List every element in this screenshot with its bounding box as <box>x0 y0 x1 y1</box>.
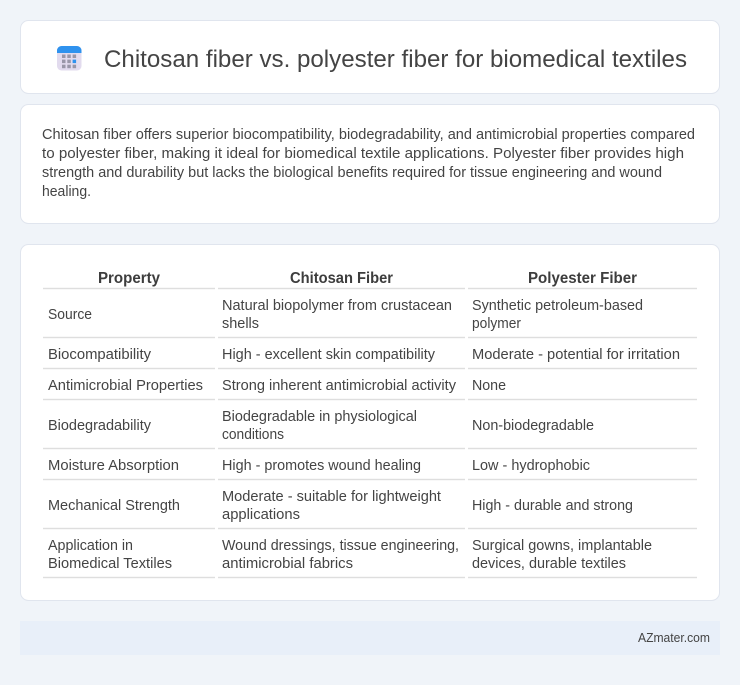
row: mechanical strength: applications <box>222 507 300 523</box>
row: source: Natural biopolymer from crustacean <box>222 298 452 314</box>
table header: Chitosan Fiber <box>290 270 393 287</box>
row: source: polymer <box>472 316 521 332</box>
summary text <box>42 127 695 200</box>
panel: comparison table <box>20 244 720 600</box>
row: mechanical strength <box>48 489 633 523</box>
row: biodegradability: Non-biodegradable <box>472 418 594 434</box>
title: Chitosan fiber vs. polyester fiber for biomedical textiles <box>104 46 687 73</box>
row: moisture absorption: Low - hydrophobic <box>472 458 590 474</box>
row: mechanical strength: Mechanical Strength <box>48 498 180 514</box>
row: biocompatibility: High - excellent skin compatibility <box>222 347 436 363</box>
row: biocompatibility <box>48 347 680 363</box>
header panel <box>20 20 720 94</box>
row: mechanical strength: Moderate - suitable for lightweight <box>222 489 441 505</box>
row: biodegradability: Biodegradable in physiological <box>222 409 417 425</box>
table header: Polyester Fiber <box>528 270 637 287</box>
row: antimicrobial properties: Strong inherent antimicrobial activity <box>222 378 457 394</box>
summary text: to polyester fiber, making it ideal for biomedical textile applications. Polyester fiber provides high <box>42 146 684 162</box>
row: application in biomedical textiles: Biomedical Textiles <box>48 556 172 572</box>
row: biodegradability <box>48 409 594 443</box>
row: application in biomedical textiles: devices, durable textiles <box>472 556 626 572</box>
summary text: strength and durability but lacks the biological benefits required for tissue engineering and wound <box>42 165 662 181</box>
row: application in biomedical textiles: antimicrobial fabrics <box>222 556 353 572</box>
row: antimicrobial properties <box>48 378 506 394</box>
footer credit: AZmater.com <box>638 631 710 645</box>
row: biodegradability: Biodegradability <box>48 418 152 434</box>
row: application in biomedical textiles: Application in <box>48 538 133 554</box>
row: source: Source <box>48 307 92 323</box>
row: biocompatibility: Moderate - potential for irritation <box>472 347 680 363</box>
row: moisture absorption: Moisture Absorption <box>48 458 179 474</box>
row: application in biomedical textiles: Surgical gowns, implantable <box>472 538 652 554</box>
row: biodegradability: conditions <box>222 427 284 443</box>
row: antimicrobial properties: None <box>472 378 506 394</box>
row: mechanical strength: High - durable and strong <box>472 498 633 514</box>
row: moisture absorption: High - promotes wound healing <box>222 458 421 474</box>
icon: calendar <box>57 46 82 70</box>
row: antimicrobial properties: Antimicrobial Properties <box>48 378 203 394</box>
table header <box>98 270 637 287</box>
row: source: shells <box>222 316 259 332</box>
summary text: healing. <box>42 184 91 200</box>
row: source: Synthetic petroleum-based <box>472 298 643 314</box>
footer <box>20 621 720 655</box>
row: application in biomedical textiles: Wound dressings, tissue engineering, <box>222 538 459 554</box>
row: application in biomedical textiles <box>48 538 652 572</box>
row: biocompatibility: Biocompatibility <box>48 347 152 363</box>
row: moisture absorption <box>48 458 590 474</box>
panel: summary <box>20 104 720 224</box>
row: source <box>48 298 643 332</box>
table header: Property <box>98 270 160 287</box>
summary text: Chitosan fiber offers superior biocompatibility, biodegradability, and antimicrobial properties compared <box>42 127 695 143</box>
